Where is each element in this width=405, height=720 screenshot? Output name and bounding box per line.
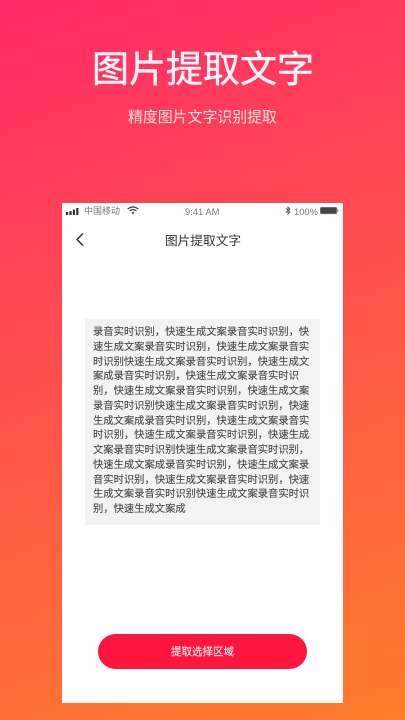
- text block: 录音实时识别快速生成文案录音实时识别，快速: [93, 401, 309, 412]
- battery text: 100%: [294, 206, 318, 217]
- text block: 文案录音实时识别快速生成文案录音实时识别，: [93, 445, 309, 456]
- carrier: 中国移动: [84, 206, 120, 216]
- status bar: [66, 206, 338, 217]
- button label: 提取选择区域: [171, 646, 234, 658]
- subtitle: 精度图片文字识别提取: [128, 110, 277, 126]
- text block: 别，快速生成文案录音实时识别，快速生成文案: [93, 386, 309, 397]
- title: 图片提取文字: [92, 49, 314, 90]
- nav title: 图片提取文字: [165, 234, 241, 248]
- icon: battery: [320, 207, 338, 214]
- text block: 时识别快速生成文案录音实时识别，快速生成文: [93, 357, 309, 368]
- button: [98, 634, 307, 669]
- icon: wifi: [127, 206, 139, 214]
- text block: 生成文案成录音实时识别，快速生成文案录音实: [93, 416, 309, 427]
- text block: 案成录音实时识别，快速生成文案录音实时识: [93, 371, 299, 382]
- text block: 生成文案录音实时识别快速生成文案录音实时识: [93, 489, 309, 500]
- icon: signal bars: [66, 208, 78, 215]
- time: 9:41 AM: [185, 206, 219, 217]
- text block: 时识别，快速生成文案录音实时识别，快速生成: [93, 430, 309, 441]
- text block: 快速生成文案成录音实时识别，快速生成文案录: [93, 460, 309, 471]
- icon: bluetooth: [286, 206, 290, 215]
- panel: phone screen: [62, 203, 343, 703]
- icon: back arrow: [76, 233, 84, 246]
- text block: [85, 319, 320, 525]
- text block: 录音实时识别，快速生成文案录音实时识别，快: [93, 327, 309, 338]
- text block: 速生成文案录音实时识别，快速生成文案录音实: [93, 342, 309, 353]
- text block: 别，快速生成文案成: [93, 504, 186, 515]
- text block: 音实时识别，快速生成文案录音实时识别，快速: [93, 475, 309, 486]
